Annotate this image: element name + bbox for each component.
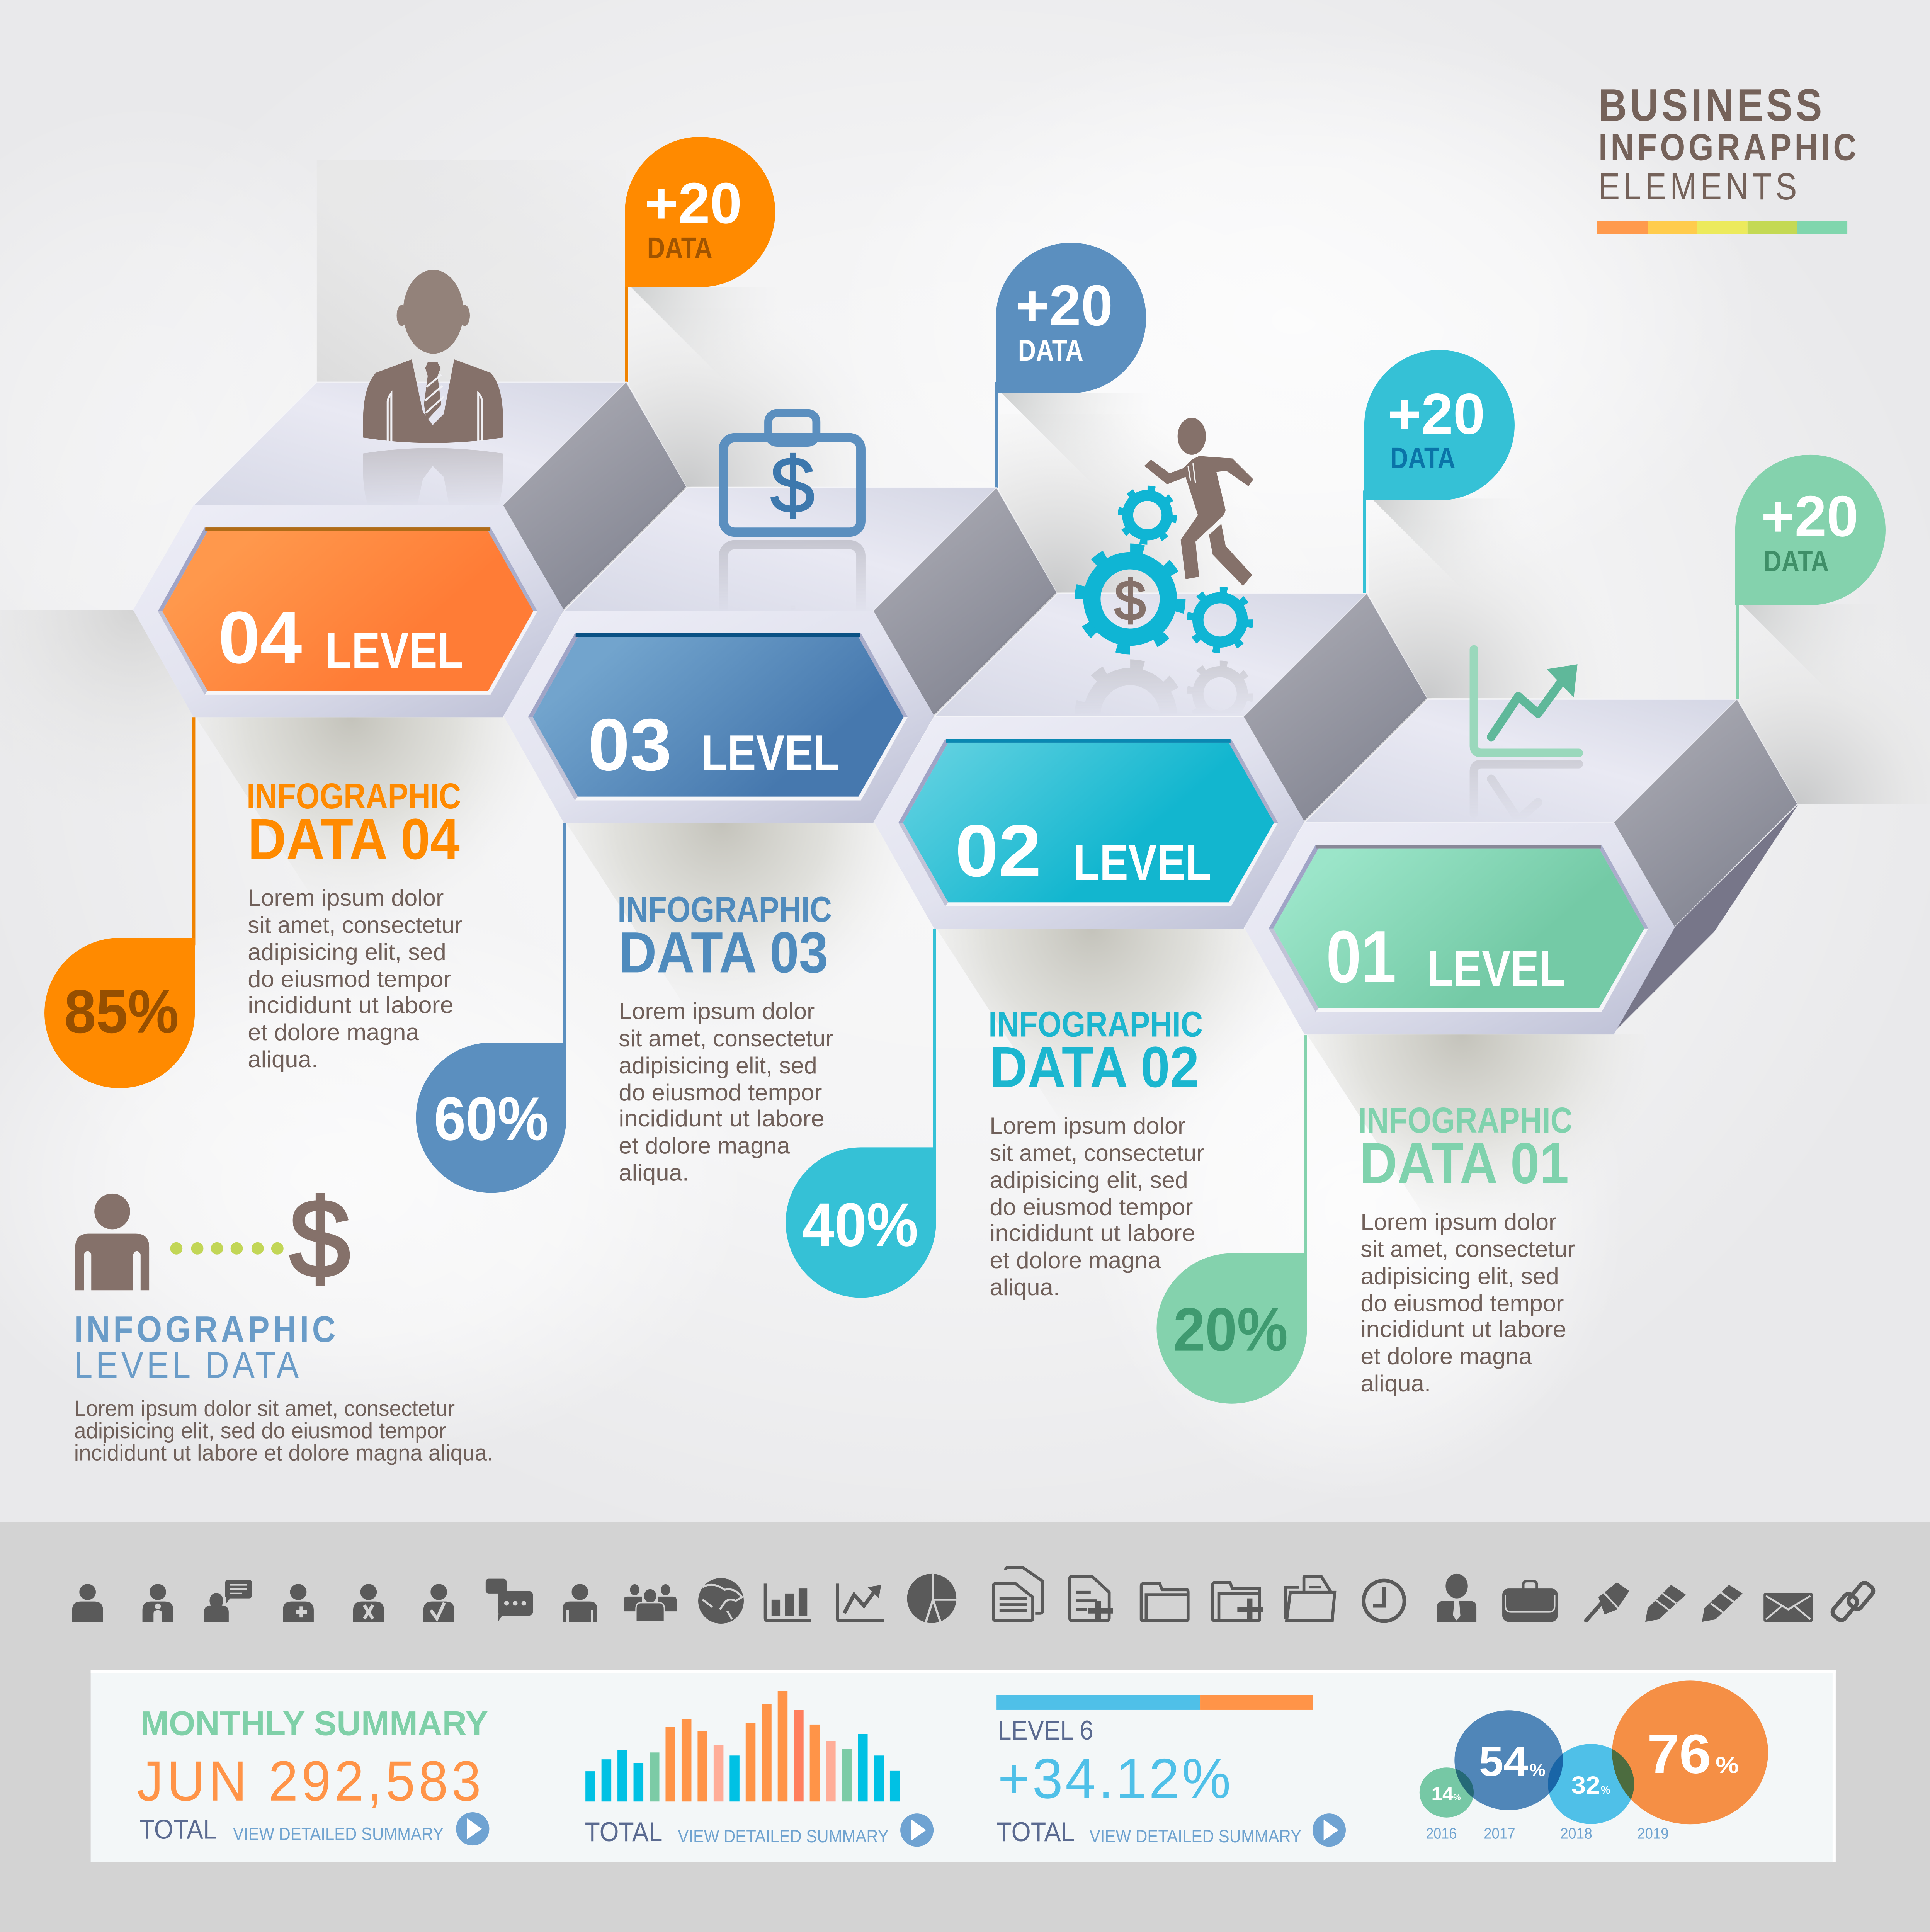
title: INFOGRAPHIC — [1598, 126, 1860, 168]
icon: marker — [1702, 1585, 1743, 1622]
level 04 flag with stem: DATA — [647, 232, 712, 265]
icon: add document — [1070, 1576, 1113, 1621]
level data paragraph: incididunt ut labore et dolore magna aliqua. — [74, 1440, 493, 1465]
icon: businessman — [363, 270, 503, 443]
icon: person with arms — [563, 1584, 597, 1622]
percent drop 60% — [416, 823, 566, 1193]
bubble chart — [1420, 1680, 1768, 1842]
icon: person to dollar — [75, 1176, 350, 1300]
level data heading — [74, 1309, 339, 1386]
level 03 label: LEVEL — [701, 724, 839, 781]
icon: add folder — [1213, 1582, 1263, 1622]
level 04 flag with stem: +20 — [644, 170, 742, 235]
title colour bar — [1597, 221, 1847, 234]
total row 1 — [139, 1812, 489, 1845]
level 02 label: 02 — [955, 810, 1041, 892]
bubble chart: % — [1453, 1793, 1461, 1802]
level 01 label: 01 — [1326, 915, 1396, 998]
bubble chart: 32 — [1571, 1771, 1600, 1799]
icon: pencil — [1645, 1585, 1686, 1622]
icon: folder — [1141, 1583, 1188, 1621]
hexagon block level 02 — [874, 594, 1427, 929]
icon: growth chart — [1474, 650, 1579, 753]
total row 2: VIEW DETAILED SUMMARY — [678, 1826, 889, 1846]
level 01 label: LEVEL — [1427, 940, 1565, 997]
total row 1: VIEW DETAILED SUMMARY — [233, 1824, 444, 1844]
icon: dollar briefcase: $ — [770, 440, 815, 530]
percent drop 40% — [786, 929, 936, 1298]
icon: bar chart — [765, 1583, 811, 1621]
total row 2: TOTAL — [585, 1816, 663, 1847]
level 03 flag with stem: DATA — [1018, 334, 1083, 367]
level 6 value: +34.12% — [998, 1747, 1233, 1810]
level 03 label: 03 — [588, 703, 672, 786]
level 03 flag with stem: +20 — [1015, 273, 1113, 338]
icon: user outline — [143, 1584, 173, 1622]
back wall shading — [0, 160, 1930, 937]
level data heading: INFOGRAPHIC — [74, 1309, 339, 1350]
total row 2 — [585, 1813, 934, 1847]
icon: globe — [698, 1578, 744, 1624]
data 03 text block: INFOGRAPHIC — [617, 889, 832, 930]
chart reflection — [1470, 760, 1583, 801]
total row 3: TOTAL — [996, 1816, 1075, 1847]
gears reflection — [1087, 659, 1253, 700]
percent drop 20% — [1156, 1035, 1307, 1404]
bubble chart: % — [1529, 1761, 1546, 1780]
icon row — [72, 1568, 1875, 1624]
icon: runner on gears: $ — [1114, 569, 1146, 632]
bubble chart: % — [1601, 1784, 1610, 1796]
shadows under hexagons — [196, 717, 1678, 1266]
icon: envelope — [1763, 1593, 1813, 1622]
level data heading: LEVEL DATA — [74, 1345, 302, 1386]
data 02 text block: INFOGRAPHIC — [988, 1004, 1203, 1044]
monthly value: JUN 292,583 — [137, 1750, 485, 1813]
level 02 flag with stem: DATA — [1390, 442, 1456, 475]
title: ELEMENTS — [1598, 165, 1801, 207]
level 02 flag with stem — [1363, 350, 1515, 594]
bubble chart: 76 — [1647, 1723, 1711, 1785]
bottom band — [0, 1522, 1930, 1932]
data 01 text block: INFOGRAPHIC — [1358, 1100, 1573, 1140]
level 02 label: LEVEL — [1073, 834, 1211, 891]
total row 3: VIEW DETAILED SUMMARY — [1090, 1826, 1301, 1846]
icon: business bag — [1502, 1581, 1558, 1622]
icon: line chart — [837, 1583, 884, 1621]
level 01 label — [1326, 915, 1565, 998]
hexagon block level 03 — [503, 488, 1057, 823]
level 6 label: LEVEL 6 — [998, 1715, 1093, 1745]
icon: documents — [993, 1568, 1042, 1621]
icon: hammer — [1586, 1582, 1629, 1621]
total row 1: TOTAL — [139, 1814, 217, 1845]
total row 3 — [996, 1813, 1346, 1847]
icon: verified user — [423, 1584, 454, 1622]
level 04 label — [218, 596, 463, 679]
bubble chart: 2016 — [1426, 1825, 1457, 1842]
data 03 text block: DATA 03 — [619, 920, 828, 985]
icon: open folder — [1286, 1576, 1335, 1621]
percent drop 40%: 40% — [803, 1190, 918, 1259]
level 03 label — [588, 703, 839, 786]
hexagon block level 04 — [133, 382, 687, 717]
icon: add user — [283, 1584, 314, 1622]
level 02 label — [955, 810, 1211, 892]
level 01 flag with stem — [1735, 455, 1886, 699]
percent drop 60%: 60% — [434, 1084, 548, 1153]
percent drop 20%: 20% — [1173, 1295, 1288, 1364]
icon: manager — [1437, 1574, 1476, 1622]
icon: person — [72, 1584, 103, 1622]
level 04 label: 04 — [218, 596, 302, 679]
icon: clock — [1364, 1580, 1405, 1621]
icon: team — [624, 1584, 677, 1622]
icon: runner on gears — [1080, 418, 1253, 650]
businessman reflection — [363, 448, 503, 492]
level 6 progress bar — [996, 1695, 1313, 1710]
bubble chart: 2018 — [1560, 1825, 1592, 1842]
level data paragraph: Lorem ipsum dolor sit amet, consectetur — [74, 1396, 455, 1421]
bubble chart: 14 — [1431, 1784, 1454, 1804]
icon: pie chart — [907, 1574, 957, 1623]
data 03 text block — [617, 889, 833, 1185]
level 02 flag with stem: +20 — [1388, 381, 1485, 446]
level 03 flag with stem — [995, 243, 1146, 488]
bubble chart: 54 — [1479, 1738, 1528, 1785]
title — [1598, 80, 1860, 207]
percent drop 85% — [44, 717, 195, 1088]
icon: remove user — [353, 1584, 384, 1622]
data 01 text block — [1358, 1100, 1575, 1396]
data 02 text block — [988, 1004, 1204, 1300]
data 04 text block: DATA 04 — [248, 806, 460, 871]
icon: chat bubbles — [486, 1579, 533, 1622]
title: BUSINESS — [1598, 80, 1825, 131]
level data paragraph — [74, 1396, 493, 1465]
data 04 text block — [247, 776, 462, 1072]
icon: person speaking — [204, 1580, 252, 1622]
level 01 flag with stem: DATA — [1763, 545, 1829, 578]
level 01 flag with stem: +20 — [1761, 483, 1859, 548]
icon: dollar briefcase — [723, 413, 861, 532]
data 04 text block: INFOGRAPHIC — [247, 776, 461, 816]
monthly summary heading: MONTHLY SUMMARY — [141, 1704, 488, 1743]
icon: chain link — [1831, 1581, 1875, 1622]
briefcase reflection — [719, 540, 866, 594]
icon: person to dollar: $ — [290, 1176, 350, 1300]
level data paragraph: adipisicing elit, sed do eiusmod tempor — [74, 1418, 446, 1443]
level 04 label: LEVEL — [325, 622, 463, 679]
data 01 text block: DATA 01 — [1359, 1131, 1569, 1196]
bubble chart: 2017 — [1484, 1825, 1515, 1842]
summary panel — [91, 1670, 1836, 1862]
bar chart — [585, 1691, 900, 1801]
data 02 text block: DATA 02 — [990, 1034, 1199, 1099]
briefcase reflection: $ — [770, 594, 815, 684]
hexagon block level 01 — [1244, 699, 1798, 1034]
percent drop 85%: 85% — [64, 977, 179, 1046]
level 04 flag with stem — [625, 137, 775, 382]
bubble chart: % — [1716, 1752, 1739, 1778]
bubble chart: 2019 — [1637, 1825, 1669, 1842]
